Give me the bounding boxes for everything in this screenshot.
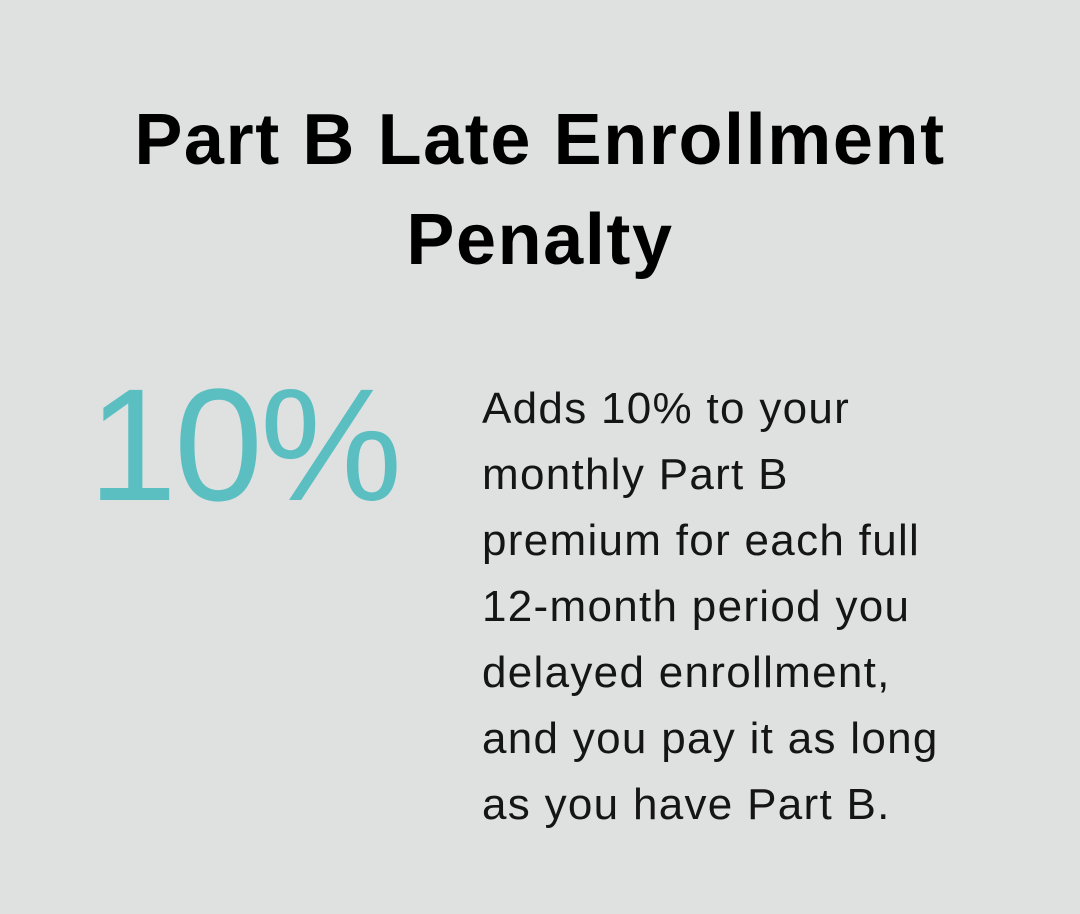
title (134, 100, 946, 280)
title: Penalty (406, 200, 674, 280)
description text (482, 384, 939, 829)
title: Part B Late Enrollment (134, 100, 946, 180)
description text: as you have Part B. (482, 780, 891, 829)
description text: monthly Part B (482, 450, 789, 499)
description text: and you pay it as long (482, 714, 939, 763)
description text: 12-month period you (482, 582, 910, 631)
description text: premium for each full (482, 516, 920, 565)
statistic: 10%: 10% (88, 355, 399, 534)
description text: delayed enrollment, (482, 648, 891, 697)
description text: Adds 10% to your (482, 384, 850, 433)
